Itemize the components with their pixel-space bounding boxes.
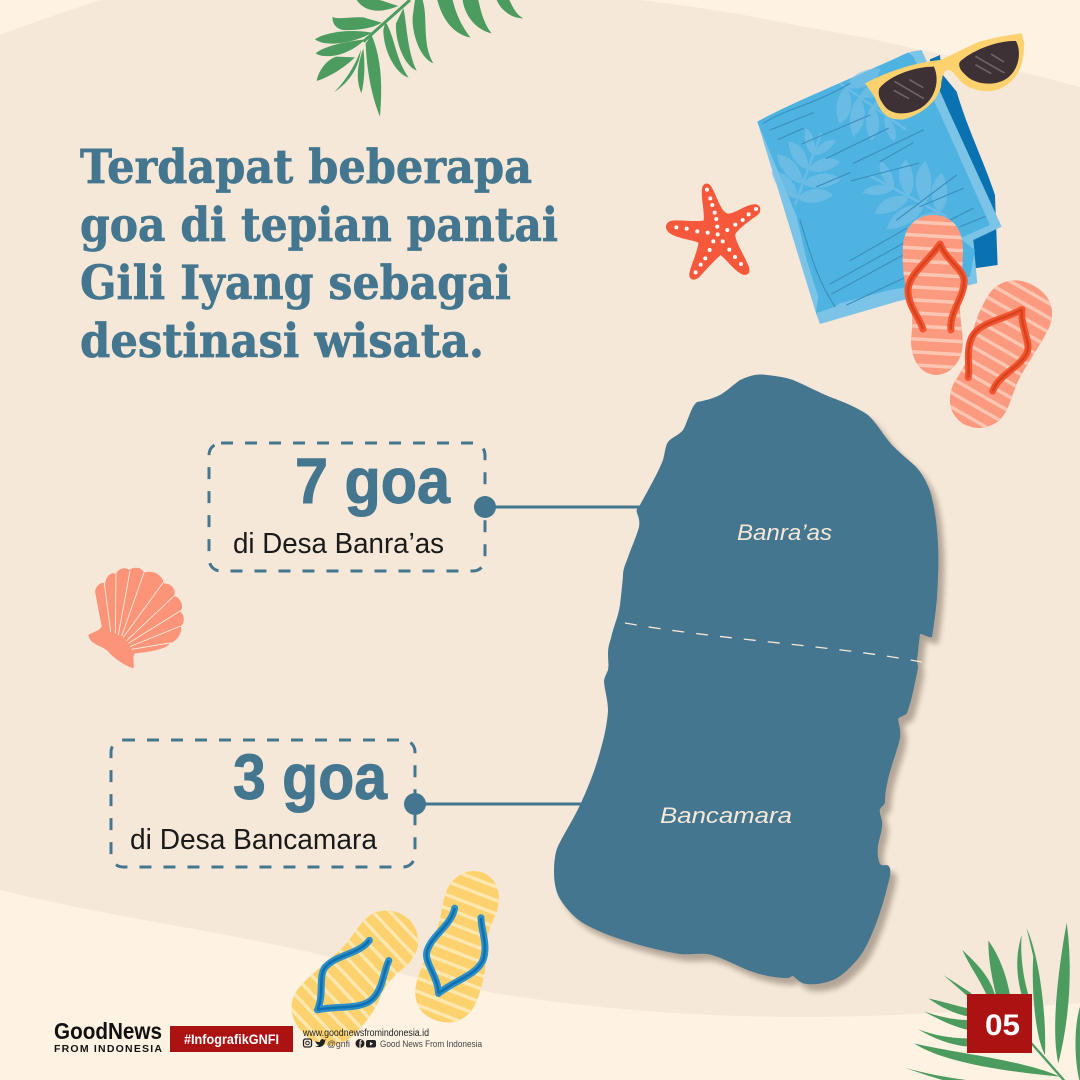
icon: yellow flip-flop right [402, 862, 520, 1032]
callout: 3 goa: di Desa Bancamara [130, 824, 378, 856]
icon: pink flip-flop right [926, 267, 1068, 441]
callout: 7 goa: 7 goa [295, 445, 450, 517]
callout: 7 goa [209, 443, 645, 571]
page number: 05 [985, 1009, 1020, 1042]
map: Gili Iyang island: Bancamara [660, 803, 792, 828]
footer logo [54, 1018, 162, 1055]
callout: 3 goa [111, 740, 585, 867]
page number [967, 994, 1032, 1053]
footer contact: www.goodnewsfromindonesia.id [302, 1028, 429, 1039]
icon: yellow flip-flop left [274, 893, 442, 1063]
icon: starfish [667, 185, 759, 278]
icon: palm leaf bottom right [905, 923, 1080, 1080]
icon: towel [757, 50, 1002, 324]
title [80, 140, 558, 369]
icon: palm leaf top [315, 0, 523, 117]
icon: pink flip-flop left [898, 215, 968, 375]
callout: 3 goa: 3 goa [233, 741, 387, 813]
footer logo: FROM INDONESIA [54, 1043, 162, 1055]
title: destinasi wisata. [80, 314, 484, 369]
footer contact [302, 1028, 483, 1050]
icon: scallop shell [88, 568, 184, 668]
hashtag badge [170, 1026, 293, 1052]
callout: 7 goa: di Desa Banra’as [233, 528, 444, 560]
map: Gili Iyang island [554, 374, 944, 991]
title: goa di tepian pantai [80, 198, 558, 253]
hashtag badge: #InfografikGNFI [184, 1031, 279, 1047]
title: Gili Iyang sebagai [80, 256, 511, 311]
title: Terdapat beberapa [80, 140, 532, 195]
footer contact: @gnfi [327, 1039, 350, 1050]
footer logo: GoodNews [54, 1018, 162, 1044]
icon: sunglasses [865, 33, 1024, 119]
map: Gili Iyang island: Banra’as [737, 520, 832, 545]
footer contact: Good News From Indonesia [380, 1039, 483, 1050]
